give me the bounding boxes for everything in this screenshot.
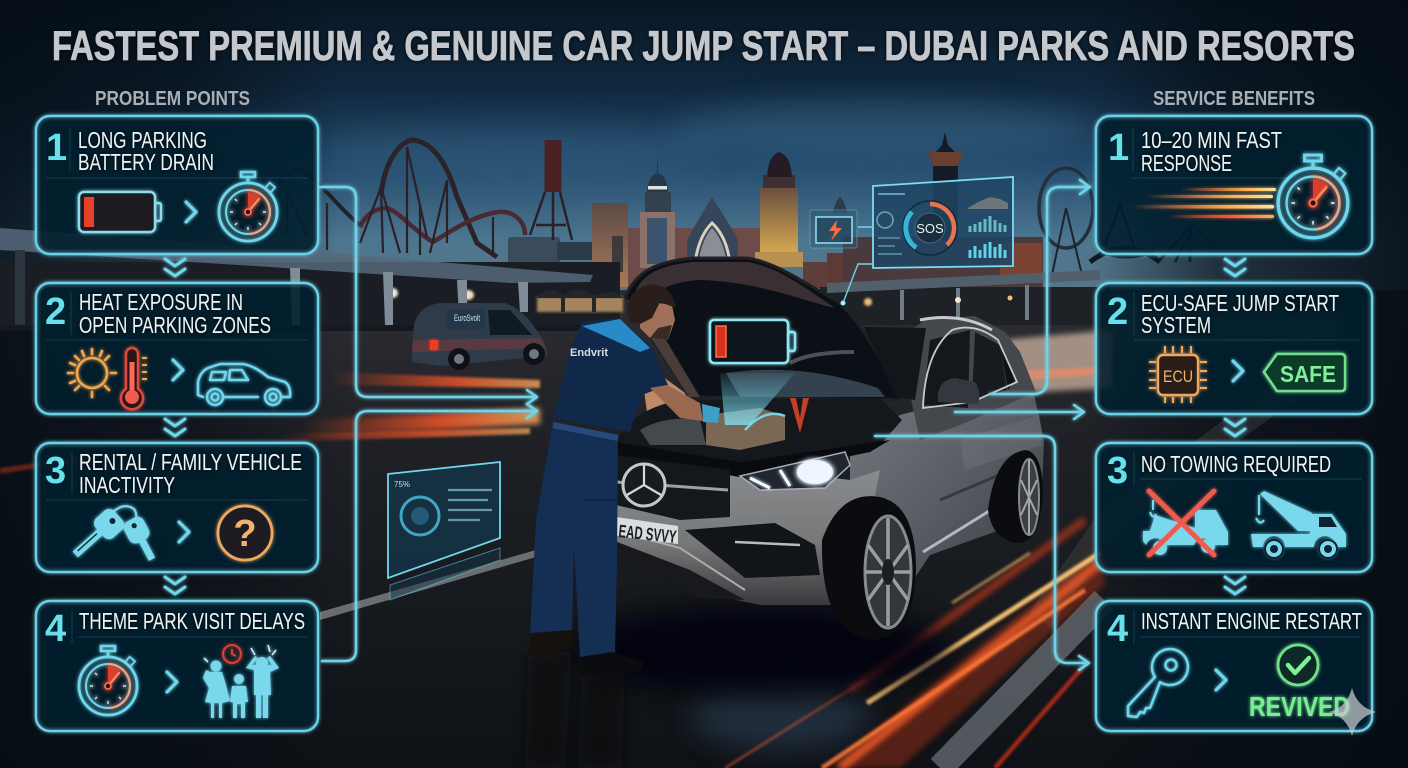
panel: benefit 2 ecu-safe	[1096, 283, 1372, 414]
icon: stopwatch	[219, 172, 277, 241]
text: rental family vehicle inactivity: RENTAL / FAMILY VEHICLE	[79, 449, 302, 475]
icon: green check	[1278, 645, 1318, 685]
panel: benefit 3 no towing	[1096, 443, 1372, 572]
roof	[898, 316, 1036, 440]
connector: car to benefit 2	[955, 405, 1084, 419]
headlight	[740, 452, 850, 490]
shoulder stripe	[582, 319, 650, 352]
left widgets	[877, 212, 893, 228]
arrow: chevron 1 to 2	[165, 259, 185, 276]
hologram dashboard: SOS: SOS	[916, 221, 944, 236]
icon: ignition key	[1128, 649, 1188, 717]
roller coasters	[277, 140, 1228, 275]
icon: chevron	[173, 360, 183, 380]
icon: chevron	[186, 202, 196, 222]
panel: problem 1 long parking battery drain	[36, 116, 318, 254]
canopy structures	[0, 228, 1110, 330]
icon: stopwatch	[79, 646, 137, 715]
gauge	[903, 201, 957, 255]
far wall	[627, 228, 760, 290]
text: long parking battery drain: BATTERY DRAIN	[78, 149, 214, 175]
arm	[650, 385, 703, 421]
text: fast response: 10–20 MIN FAST	[1141, 127, 1282, 153]
head	[640, 300, 675, 340]
number 2: 2	[45, 291, 66, 333]
number 3: 3	[1107, 450, 1128, 492]
grille	[616, 455, 730, 520]
arrow: chevron 1 to 2	[1225, 259, 1245, 276]
rear wheel	[988, 450, 1043, 543]
text: no towing required: NO TOWING REQUIRED	[1141, 451, 1331, 477]
text: revived: REVIVED	[1249, 691, 1350, 722]
square tower	[592, 203, 628, 287]
arrow: chevron 3 to 4	[1225, 577, 1245, 594]
hologram dashboard: SOS	[810, 177, 1013, 306]
panel: problem 4 theme park delays	[36, 601, 318, 731]
text: heat exposure: OPEN PARKING ZONES	[79, 312, 271, 338]
jump leads	[790, 398, 809, 433]
text: ecu-safe jump start system: SYSTEM	[1141, 312, 1211, 338]
icon: sun	[68, 349, 116, 397]
icon: suv outline	[198, 364, 290, 405]
connector: car to benefit 1	[990, 180, 1090, 394]
dark right tower	[928, 132, 963, 240]
hologram dashboard: diagnostics	[388, 462, 500, 600]
number 1: 1	[46, 127, 67, 169]
mirror	[938, 378, 979, 404]
icon: chevron	[1216, 670, 1226, 690]
hood lip	[616, 440, 890, 478]
shirt	[553, 318, 668, 432]
hologram dashboard: diagnostics: 75%	[394, 480, 410, 489]
icon: chevron	[179, 522, 189, 542]
arrow: chevron 2 to 3	[165, 419, 185, 436]
text: ecu-safe jump start system: ECU-SAFE JUMP START	[1141, 290, 1339, 316]
hood liner	[726, 370, 885, 397]
icon: low battery	[79, 192, 161, 232]
panel: problem 2 heat exposure	[36, 283, 318, 414]
icon: safe tag	[1264, 354, 1345, 391]
text: heat exposure: HEAT EXPOSURE IN	[79, 289, 243, 315]
hologram battery above engine	[710, 320, 795, 363]
mosque tower	[640, 162, 675, 268]
battery pack	[706, 408, 785, 450]
number 1: 1	[1108, 127, 1129, 169]
number plate	[616, 517, 678, 547]
windshield	[864, 327, 926, 400]
icon: thermometer	[121, 348, 147, 409]
sill	[923, 500, 1007, 552]
icon: crossed out tow truck	[1143, 491, 1228, 555]
text: long parking battery drain: LONG PARKING	[78, 127, 207, 153]
light streaks on the road	[0, 300, 1340, 768]
connector: car to benefit 4	[875, 436, 1089, 670]
panel: problem 3 rental family vehicle	[36, 443, 318, 572]
front bumper	[612, 450, 880, 605]
chrome trim	[923, 328, 1017, 408]
icon: tow truck	[1251, 491, 1346, 558]
engine bay	[616, 398, 902, 462]
orange light trails	[830, 545, 1104, 768]
trousers	[530, 422, 618, 660]
icon: speed streaks	[1132, 188, 1276, 218]
icon: ecu chip: ECU	[1163, 367, 1193, 386]
connector: problem 1 to car	[318, 187, 537, 404]
front wheel	[822, 496, 916, 640]
open hood	[625, 258, 902, 400]
number 3: 3	[45, 450, 66, 492]
side windows	[923, 330, 970, 408]
lower intake	[685, 523, 820, 578]
skyline: theme park buildings	[508, 132, 1043, 290]
emblem	[623, 464, 665, 506]
icon: safe tag: SAFE	[1280, 361, 1336, 387]
battery widget	[810, 210, 872, 248]
side body	[850, 385, 1044, 600]
icon: question mark	[218, 506, 272, 560]
heading: service benefits: SERVICE BENEFITS	[1153, 88, 1315, 110]
number 4: 4	[45, 608, 66, 650]
icon: chevron	[1233, 361, 1243, 381]
road marking	[320, 550, 536, 620]
boots	[530, 630, 574, 657]
icon: sparkle watermark	[1329, 688, 1376, 736]
mechanic	[525, 284, 720, 768]
shadows	[525, 650, 625, 768]
icon: question mark: ?	[233, 513, 257, 555]
icon: large stopwatch	[1278, 155, 1348, 238]
icon: chevron	[167, 672, 177, 692]
icon: ecu chip	[1149, 346, 1207, 403]
text: rental family vehicle inactivity: INACTIVITY	[79, 472, 175, 498]
car	[570, 258, 1044, 695]
hologram beam	[720, 373, 795, 425]
panel: benefit 1 fast response	[1096, 116, 1372, 254]
service van	[412, 303, 547, 370]
icon: car keys	[67, 506, 162, 564]
arrow: chevron 2 to 3	[1225, 419, 1245, 436]
connector: problem 4 to car	[322, 404, 537, 661]
heading: problem points: PROBLEM POINTS	[95, 88, 250, 110]
arch building	[687, 197, 738, 268]
number 4: 4	[1107, 608, 1128, 650]
road glow behind hood	[640, 360, 692, 425]
mini charts	[968, 197, 1008, 209]
cylinder building	[508, 237, 560, 269]
number 2: 2	[1107, 291, 1128, 333]
gold tower	[755, 152, 803, 267]
panel: benefit 4 instant engine restart	[1096, 601, 1372, 731]
icon: stressed family	[203, 645, 279, 718]
text: theme park visit delays: THEME PARK VISIT DELAYS	[79, 608, 305, 634]
service van: EuroSvolt	[454, 313, 480, 323]
arrow: chevron 3 to 4	[165, 577, 185, 594]
mechanic: Endvrit	[570, 347, 608, 359]
number plate: EAD SVVY	[618, 521, 677, 547]
grey road band	[940, 600, 1104, 768]
glove	[702, 404, 720, 423]
text: fast response: RESPONSE	[1141, 150, 1232, 176]
